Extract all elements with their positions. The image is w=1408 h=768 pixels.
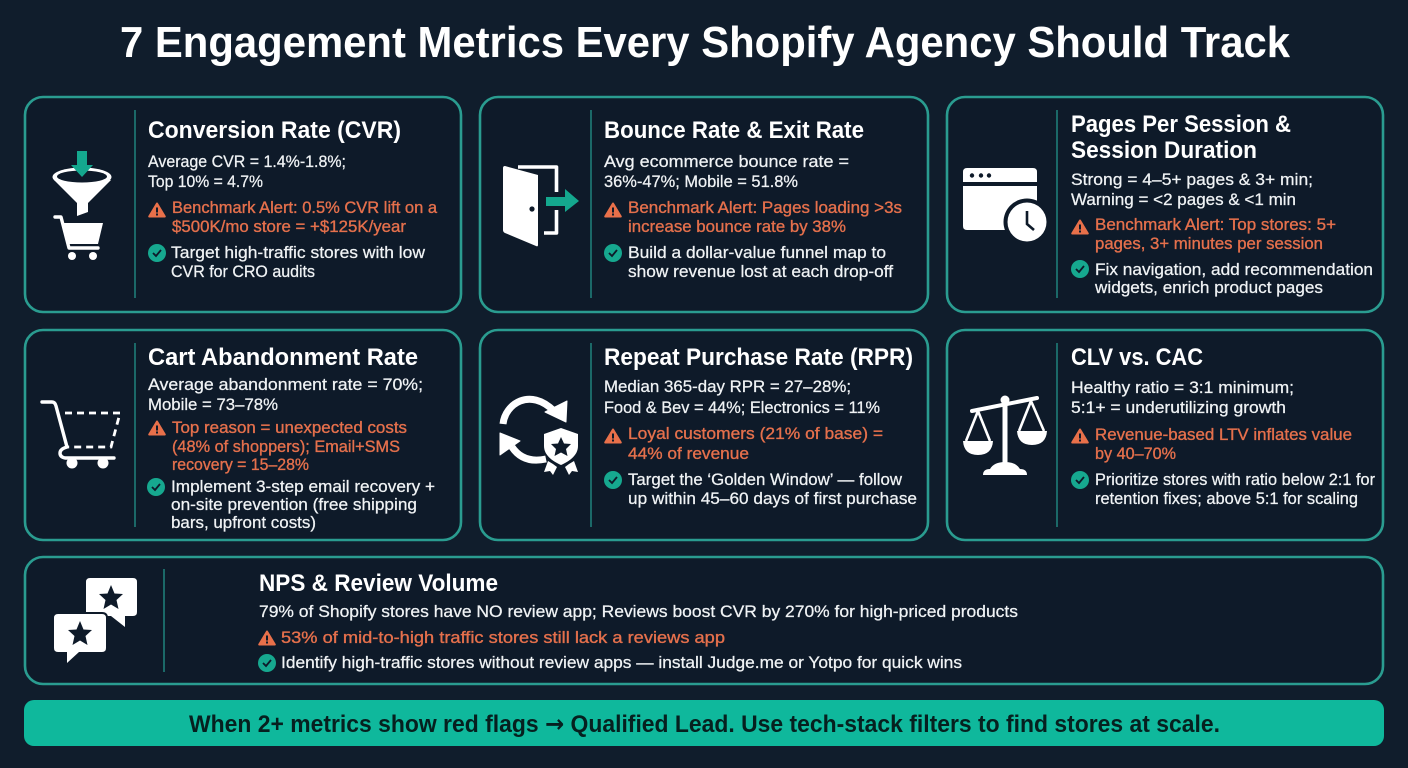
panel: cart abandonment — [25, 330, 461, 540]
stats text — [1071, 378, 1294, 417]
call to action banner — [24, 700, 1384, 746]
action tip: Target high-traffic stores with low — [171, 243, 426, 262]
icon: check — [1071, 260, 1089, 278]
alert text — [172, 418, 407, 474]
benchmark alert — [172, 198, 438, 236]
heading: NPS & Review Volume — [259, 570, 498, 597]
panel: pages per session — [947, 97, 1383, 312]
stats text: Average abandonment rate = 70%; — [148, 375, 423, 394]
stats text: Healthy ratio = 3:1 minimum; — [1071, 378, 1294, 397]
panel: bounce rate — [480, 97, 928, 312]
stats text: 36%-47%; Mobile = 51.8% — [604, 172, 798, 191]
action tip: CVR for CRO audits — [171, 262, 315, 281]
icon: warning — [605, 204, 621, 216]
panel: repeat purchase rate — [480, 330, 928, 540]
icon: warning — [259, 632, 275, 644]
icon: door with exit arrow — [503, 166, 579, 246]
action tip: Fix navigation, add recommendation — [1095, 260, 1373, 279]
alert text — [1095, 425, 1352, 463]
heading: Repeat Purchase Rate (RPR) — [604, 344, 913, 371]
benchmark alert: Benchmark Alert: Pages loading >3s — [628, 198, 902, 217]
stats text: Median 365-day RPR = 27–28%; — [604, 377, 851, 396]
stats text: 79% of Shopify stores have NO review app; Reviews boost CVR by 270% for high-priced products — [259, 602, 1018, 621]
stats text — [1071, 170, 1313, 209]
heading: Session Duration — [1071, 137, 1257, 164]
icon: check — [148, 244, 166, 262]
icon: review speech bubbles — [52, 578, 137, 665]
alert text: 53% of mid-to-high traffic stores still lack a reviews app — [281, 628, 725, 647]
panel: CLV vs CAC — [947, 330, 1383, 540]
action tip: Target the ‘Golden Window’ — follow — [628, 470, 903, 489]
action tip — [171, 243, 426, 281]
icon: check — [604, 244, 622, 262]
icon: warning — [1072, 430, 1088, 442]
action tip — [628, 470, 917, 508]
stats text: 5:1+ = underutilizing growth — [1071, 398, 1286, 417]
panel: NPS and review volume — [25, 557, 1383, 684]
icon: balance scales — [963, 396, 1047, 475]
icon: warning — [605, 430, 621, 442]
banner text: When 2+ metrics show red flags → Qualified Lead. Use tech-stack filters to find stores at scale. — [189, 710, 1220, 738]
icon: check — [1071, 471, 1089, 489]
icon: check — [604, 471, 622, 489]
title: 7 Engagement Metrics Every Shopify Agency Should Track — [120, 18, 1291, 67]
icon: check — [258, 654, 276, 672]
benchmark alert: increase bounce rate by 38% — [628, 217, 846, 236]
action tip — [1094, 260, 1373, 297]
benchmark alert — [1095, 215, 1336, 253]
benchmark alert: $500K/mo store = +$125K/year — [172, 217, 406, 236]
stats text — [604, 152, 849, 191]
stats text — [148, 375, 423, 414]
icon: browser window with clock — [963, 168, 1050, 246]
action tip — [1095, 470, 1375, 508]
action tip: Build a dollar-value funnel map to — [628, 243, 886, 262]
alert text: recovery = 15–28% — [172, 455, 309, 474]
action tip: up within 45–60 days of first purchase — [628, 489, 917, 508]
alert text: Top reason = unexpected costs — [172, 418, 407, 437]
icon: warning — [149, 422, 165, 434]
icon: repeat arrows with badge — [500, 399, 578, 475]
benchmark alert: Benchmark Alert: 0.5% CVR lift on a — [172, 198, 438, 217]
action tip: widgets, enrich product pages — [1094, 278, 1323, 297]
benchmark alert: pages, 3+ minutes per session — [1095, 234, 1323, 253]
alert text: (48% of shoppers); Email+SMS — [172, 437, 400, 456]
stats text: Food & Bev = 44%; Electronics = 11% — [604, 398, 880, 417]
stats text: Top 10% = 4.7% — [148, 172, 263, 191]
heading: CLV vs. CAC — [1071, 344, 1203, 371]
action tip: bars, upfront costs) — [171, 513, 316, 532]
icon: funnel and shopping cart — [52, 151, 112, 260]
heading: Conversion Rate (CVR) — [148, 117, 401, 144]
action tip: Implement 3-step email recovery + — [171, 477, 435, 496]
stats text: Strong = 4–5+ pages & 3+ min; — [1071, 170, 1313, 189]
stats text: Average CVR = 1.4%-1.8%; — [148, 152, 346, 171]
heading: Bounce Rate & Exit Rate — [604, 117, 864, 144]
action tip — [628, 243, 893, 281]
heading — [1071, 111, 1291, 164]
action tip: retention fixes; above 5:1 for scaling — [1095, 489, 1358, 508]
action tip: on-site prevention (free shipping — [171, 495, 417, 514]
icon: warning — [1072, 220, 1088, 234]
stats text: Avg ecommerce bounce rate = — [604, 152, 849, 171]
alert text — [628, 424, 883, 463]
icon: warning — [149, 204, 165, 216]
stats text — [148, 152, 346, 191]
action tip: Prioritize stores with ratio below 2:1 for — [1095, 470, 1375, 489]
icon: check — [147, 478, 165, 496]
alert text: 44% of revenue — [628, 444, 749, 463]
heading: Cart Abandonment Rate — [148, 344, 418, 371]
stats text: Warning = <2 pages & <1 min — [1071, 190, 1296, 209]
stats text — [604, 377, 880, 417]
alert text: by 40–70% — [1095, 444, 1176, 463]
alert text: Loyal customers (21% of base) = — [628, 424, 883, 443]
action tip — [171, 477, 435, 532]
action tip: show revenue lost at each drop-off — [628, 262, 893, 281]
benchmark alert: Benchmark Alert: Top stores: 5+ — [1095, 215, 1336, 234]
stats text: Mobile = 73–78% — [148, 395, 278, 414]
benchmark alert — [628, 198, 902, 236]
alert text: Revenue-based LTV inflates value — [1095, 425, 1352, 444]
heading: Pages Per Session & — [1071, 111, 1291, 138]
panel: conversion rate — [25, 97, 461, 312]
icon: dashed shopping cart — [42, 402, 120, 468]
action tip: Identify high-traffic stores without review apps — install Judge.me or Yotpo for quick wins — [281, 653, 962, 672]
